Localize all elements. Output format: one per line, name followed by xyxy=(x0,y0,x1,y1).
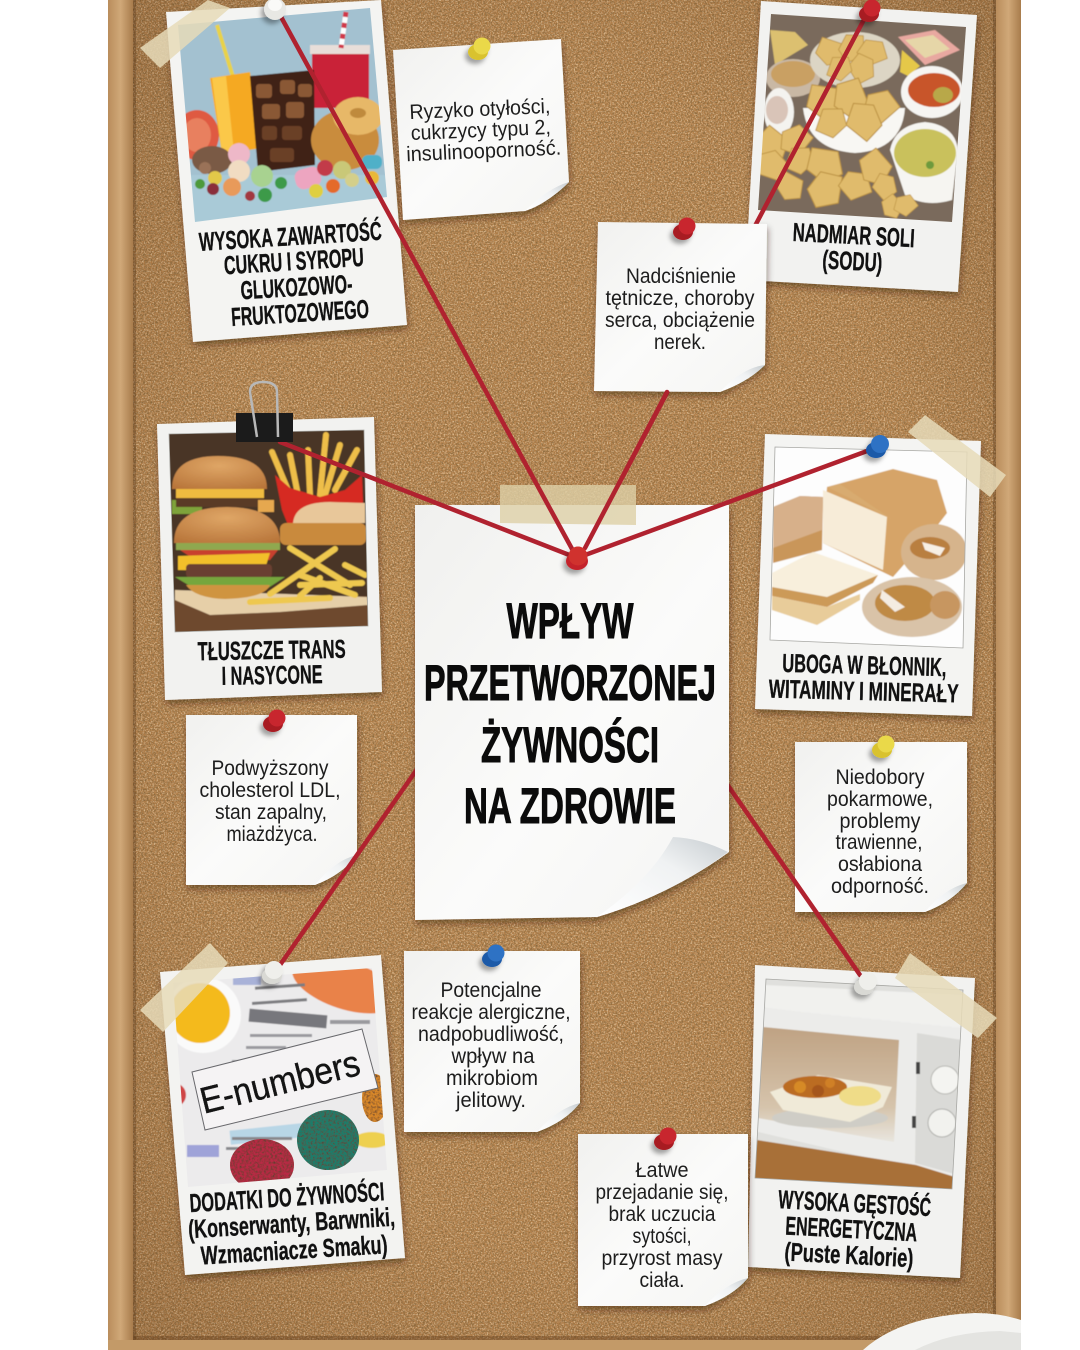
note text: osłabiona xyxy=(838,853,922,876)
pin: white microwave xyxy=(854,972,877,995)
photo: burgers and fries xyxy=(165,428,370,638)
title: ŻYWNOŚCI xyxy=(481,717,659,773)
note text: wpływ na xyxy=(451,1045,535,1068)
red strings to lower cards xyxy=(280,765,860,975)
note text xyxy=(412,979,570,1112)
caption: sugar: CUKRU I SYROPU xyxy=(223,242,365,280)
note text: cholesterol LDL, xyxy=(200,779,340,802)
note text: mikrobiom xyxy=(446,1067,538,1090)
note text: miażdżyca. xyxy=(226,823,318,846)
photo card: food additives xyxy=(160,945,405,1275)
caption: trans fats: TŁUSZCZE TRANS xyxy=(197,634,346,666)
pin: red overeating xyxy=(654,1128,676,1150)
note text xyxy=(827,766,933,898)
pin: yellow deficiencies xyxy=(872,736,894,758)
note text: nadpobudliwość, xyxy=(418,1023,564,1046)
note: LDL cholesterol xyxy=(186,715,357,885)
photo card: salt xyxy=(745,1,977,292)
note text: stan zapalny, xyxy=(215,801,327,824)
note text: brak uczucia xyxy=(608,1203,716,1226)
note: allergies xyxy=(404,951,580,1132)
caption: sugar: WYSOKA ZAWARTOŚĆ xyxy=(198,216,383,257)
caption: additives: (Konserwanty, Barwniki, xyxy=(187,1202,396,1244)
note text: sytości, xyxy=(632,1225,692,1248)
note: hypertension xyxy=(594,222,767,392)
photo card: fibre-poor food xyxy=(755,434,981,716)
note text: przyrost masy xyxy=(602,1247,723,1270)
note text: Potencjalne xyxy=(440,979,542,1002)
caption: salt xyxy=(791,217,915,279)
photo card: trans fats xyxy=(157,417,382,700)
note text: Niedobory xyxy=(836,766,925,789)
caption: trans fats: I NASYCONE xyxy=(221,659,323,691)
caption: fibre xyxy=(768,648,960,708)
note: overeating xyxy=(578,1134,748,1306)
pin: white sugar xyxy=(264,0,286,20)
label: E-numbers: E-numbers xyxy=(196,1042,364,1121)
red strings to centre pin xyxy=(280,15,878,558)
note text: nerek. xyxy=(654,331,706,354)
photo: sweet drinks and candies xyxy=(178,8,387,222)
pin: red hypertension xyxy=(673,218,696,240)
caption: additives: DODATKI DO ŻYWNOŚCI xyxy=(189,1176,385,1218)
pin: blue bread xyxy=(866,435,889,458)
binder clip xyxy=(236,382,293,442)
note: deficiencies xyxy=(795,742,967,912)
photo card: energy density xyxy=(748,965,975,1278)
caption: additives xyxy=(186,1176,397,1271)
photo card: sugar xyxy=(166,0,407,342)
note text: cukrzycy typu 2, xyxy=(410,116,551,145)
note text: serca, obciążenie xyxy=(605,309,755,332)
note text: jelitowy. xyxy=(455,1089,526,1112)
title: WPŁYW xyxy=(506,593,634,649)
caption: sugar xyxy=(198,216,387,334)
tape: additives card xyxy=(140,943,228,1032)
note text: Podwyższony xyxy=(212,757,329,780)
caption: additives: Wzmacniacze Smaku) xyxy=(200,1229,388,1271)
note text: Łatwe xyxy=(636,1159,688,1182)
note text: Ryzyko otyłości, xyxy=(409,95,551,124)
caption: sugar: GLUKOZOWO- xyxy=(240,269,353,305)
note text xyxy=(200,757,340,846)
tape: main sheet xyxy=(500,485,636,525)
note text: pokarmowe, xyxy=(827,788,933,811)
title: NA ZDROWIE xyxy=(464,778,676,834)
note text: Nadciśnienie xyxy=(626,265,736,288)
pin: yellow obesity xyxy=(468,38,490,60)
main title sheet xyxy=(415,505,729,920)
pin: blue allergies xyxy=(482,944,504,967)
caption: fibre: WITAMINY I MINERAŁY xyxy=(768,674,959,708)
note text: problemy xyxy=(840,810,921,833)
coffee plate in the corner xyxy=(863,1313,1021,1350)
note text: odporność. xyxy=(831,875,929,898)
note text xyxy=(596,1159,728,1292)
title xyxy=(424,593,716,834)
note text: tętnicze, choroby xyxy=(606,287,755,310)
red string behind hypertension note xyxy=(585,10,869,548)
caption: energy density xyxy=(775,1184,932,1274)
caption: energy density: ENERGETYCZNA xyxy=(785,1211,918,1247)
caption: fibre: UBOGA W BŁONNIK, xyxy=(782,648,947,682)
caption: energy density: (Puste Kalorie) xyxy=(784,1237,914,1273)
pin: white additives xyxy=(262,961,283,984)
title: PRZETWORZONEJ xyxy=(424,655,716,711)
caption: trans fats xyxy=(197,634,346,691)
photo: ready meal in microwave xyxy=(755,980,962,1189)
note text xyxy=(404,95,562,166)
note text xyxy=(605,265,755,354)
note: obesity risk xyxy=(393,39,569,220)
note text: przejadanie się, xyxy=(596,1181,728,1204)
caption: sugar: FRUKTOZOWEGO xyxy=(230,294,370,332)
tape: microwave card xyxy=(895,953,997,1038)
note text: reakcje alergiczne, xyxy=(412,1001,570,1024)
note text: trawienne, xyxy=(836,831,922,854)
photo: additives and E-numbers label xyxy=(174,968,386,1183)
photo: salty snacks xyxy=(758,14,966,222)
pin: red salt xyxy=(859,0,880,22)
caption: salt: (SODU) xyxy=(822,244,883,278)
pin: red LDL xyxy=(263,710,286,732)
note text: insulinooporność. xyxy=(406,137,562,166)
pin: red centre xyxy=(566,546,588,570)
note text: ciała. xyxy=(640,1269,684,1292)
photo: white bread and pastries xyxy=(765,445,970,650)
caption: energy density: WYSOKA GĘSTOŚĆ xyxy=(778,1184,932,1222)
caption: salt: NADMIAR SOLI xyxy=(792,217,915,253)
tape: sugar card xyxy=(140,0,230,68)
tape: bread card xyxy=(908,415,1006,497)
